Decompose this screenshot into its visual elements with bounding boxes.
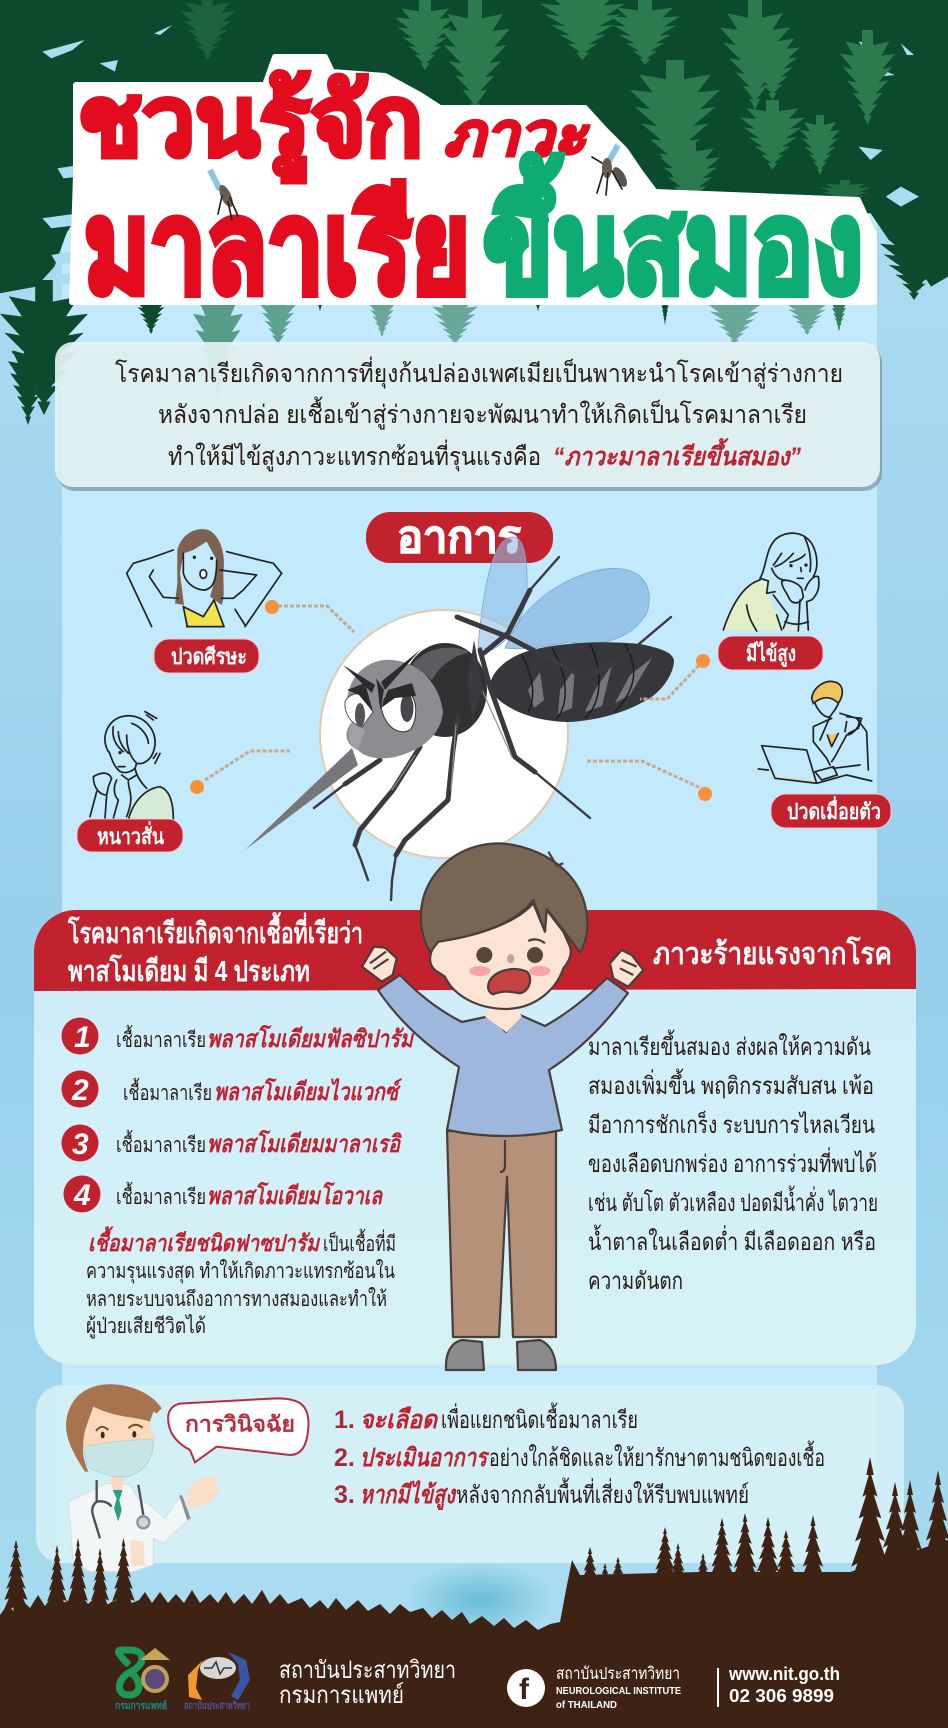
label	[718, 636, 823, 670]
header right: ภาวะร้ายแรงจากโรค	[653, 935, 892, 971]
footer department name: กรมการแพทย์	[279, 1681, 404, 1709]
stethoscope	[92, 1480, 149, 1538]
diagnosis item 3: 3.	[334, 1481, 355, 1509]
severity paragraph: มีอาการชักเกร็ง ระบบการไหลเวียน	[588, 1110, 875, 1139]
intro line 2: หลังจากปล่อ ยเชื้อเข้าสู่ร่างกายจะพัฒนาทำให้เกิดเป็นโรคมาลาเรีย	[158, 396, 807, 430]
neck	[110, 1477, 124, 1490]
mosquito illustration	[245, 537, 674, 900]
panel: diagnosis	[36, 1384, 904, 1572]
head	[362, 843, 643, 1032]
mosquito head	[245, 650, 443, 850]
list item 2: 2	[71, 1074, 89, 1107]
title white backing	[72, 57, 874, 302]
sweater	[378, 975, 628, 1136]
list item 1: พลาสโมเดียมฟัลซิปารัม	[207, 1024, 415, 1053]
connector	[272, 606, 354, 632]
symptom: chills	[77, 712, 290, 852]
facebook page text: of THAILAND	[556, 1699, 617, 1711]
eyes	[476, 947, 492, 963]
falciparum note: เชื้อมาลาเรียชนิดฟาซปารัม	[88, 1226, 321, 1256]
speech bubble	[168, 1398, 308, 1462]
diagnosis item 3: หลังจากกลับพื้นที่เสี่ยงให้รีบพบแพทย์	[456, 1477, 749, 1509]
forest silhouette and ground	[0, 1457, 948, 1728]
intro line 3: ทำให้มีไข้สูงภาวะแทรกซ้อนที่รุนแรงคือ	[168, 439, 541, 472]
list item 3: เชื้อมาลาเรีย	[116, 1130, 206, 1157]
list item 3: 3	[72, 1128, 89, 1161]
symptom: body ache: ปวดเมื่อยตัว	[787, 795, 881, 824]
severity paragraph	[588, 1029, 878, 1295]
symptom: headache	[127, 529, 354, 673]
panel body	[34, 985, 916, 1365]
intro line 1: โรคมาลาเรียเกิดจากการที่ยุงก้นปล่องเพศเมียเป็นพาหะนำโรคเข้าสู่ร่างกาย	[115, 356, 843, 389]
severity paragraph: น้ำตาลในเลือดต่ำ มีเลือดออก หรือ	[588, 1224, 876, 1256]
bubble text: การวินิจฉัย	[185, 1412, 295, 1437]
symptom: chills: หนาวสั่น	[97, 820, 164, 849]
falciparum note	[86, 1226, 396, 1339]
forest canopy	[0, 0, 948, 425]
title word malaria: มาลาเรีย	[84, 177, 470, 320]
footer institute name: สถาบันประสาทวิทยา	[279, 1657, 456, 1684]
list item 3: พลาสโมเดียมมาลาเรอิ	[207, 1129, 402, 1158]
list item 2: พลาสโมเดียมไวแวกซ์	[214, 1077, 403, 1106]
falciparum note: เป็นเชื้อที่มี	[323, 1229, 396, 1256]
mask	[83, 1440, 153, 1477]
symptom: high fever	[640, 533, 823, 699]
pants	[447, 1131, 556, 1337]
list item 2: เชื้อมาลาเรีย	[123, 1078, 212, 1105]
list item 1: เชื้อมาลาเรีย	[116, 1025, 206, 1052]
falciparum note: หลายระบบจนถึงอาการทางสมองและทำให้	[86, 1287, 387, 1311]
icon: worried woman	[723, 533, 819, 631]
icon: small mosquito left	[210, 170, 238, 220]
phone: 02 306 9899	[729, 1686, 834, 1706]
diagnosis item 2: 2.	[334, 1444, 355, 1472]
hands	[185, 1477, 222, 1508]
label	[154, 639, 259, 673]
icon: shivering woman	[90, 712, 173, 820]
header left line 2: พาสโมเดียม มี 4 ประเภท	[68, 953, 310, 988]
panel: plasmodium and severity	[34, 910, 916, 1365]
list item 4: พลาสโมเดียมโอวาเล	[207, 1181, 383, 1210]
connector	[205, 751, 290, 780]
severity paragraph: สมองเพิ่มขึ้น พฤติกรรมสับสน เพ้อ	[588, 1068, 874, 1100]
facebook page text: สถาบันประสาทวิทยา	[556, 1664, 680, 1683]
red header band	[34, 910, 916, 991]
left fist	[362, 947, 397, 982]
hair	[66, 1384, 162, 1472]
footer	[115, 1648, 840, 1712]
mosquito legs	[314, 557, 671, 900]
logo: department 80 years	[115, 1648, 170, 1712]
mosquito abdomen	[490, 642, 674, 722]
cheeks	[469, 966, 491, 976]
list item 1: 1	[74, 1021, 91, 1054]
diagnosis item 3: หากมีไข้สูง	[360, 1480, 456, 1510]
intro highlighted term: “ภาวะมาลาเรียขึ้นสมอง”	[553, 438, 801, 471]
facebook page text: NEUROLOGICAL INSTITUTE	[556, 1685, 681, 1697]
tie	[113, 1490, 123, 1522]
symptom: headache: ปวดศีรษะ	[171, 644, 247, 669]
website: www.nit.go.th	[728, 1664, 840, 1684]
diagnosis item 2: อย่างใกล้ชิดและให้ยารักษาตามชนิดของเชื้อ	[489, 1440, 825, 1472]
face	[83, 1407, 157, 1450]
icon: small mosquito right	[592, 145, 630, 195]
heading: symptoms: อาการ	[397, 513, 521, 562]
mosquito thorax	[403, 643, 487, 737]
list item 4	[64, 1176, 383, 1212]
list item 1	[62, 1018, 415, 1054]
heading: symptoms	[366, 512, 553, 563]
logo: neurological institute: สถาบันประสาทวิทยา	[184, 1700, 250, 1712]
symptom: body ache	[587, 681, 891, 828]
left and right hanging branches	[0, 200, 948, 425]
falciparum note: ความรุนแรงสุด ทำให้เกิดภาวะแทรกซ้อนใน	[86, 1259, 395, 1284]
diagnosis item 3	[334, 1477, 749, 1510]
severity paragraph: มาลาเรียขึ้นสมอง ส่งผลให้ความดัน	[588, 1029, 871, 1061]
mouth	[488, 969, 530, 994]
diagnosis item 1: เพื่อแยกชนิดเชื้อมาลาเรีย	[441, 1402, 638, 1434]
coat	[68, 1483, 190, 1572]
header left line 1: โรคมาลาเรียเกิดจากเชื้อที่เรียว่า	[67, 911, 363, 950]
medium green foliage	[180, 0, 895, 210]
white circle	[320, 610, 568, 858]
neck	[485, 1007, 522, 1032]
character: shouting boy	[362, 843, 643, 1370]
title line one: ชวนรู้จัก	[78, 66, 423, 183]
face	[430, 903, 571, 1009]
diagnosis item 1: 1.	[334, 1406, 355, 1434]
eyes	[101, 1432, 105, 1438]
divider	[717, 1668, 719, 1707]
character: doctor	[66, 1384, 308, 1572]
shoes	[446, 1340, 556, 1370]
title	[72, 57, 874, 320]
logo: neurological institute	[184, 1652, 250, 1712]
symptom: high fever: มีไข้สูง	[746, 640, 796, 668]
diagnosis item 2: ประเมินอาการ	[360, 1444, 490, 1472]
connector	[640, 661, 703, 699]
title word phawa: ภาวะ	[444, 101, 590, 168]
icon: person at laptop	[758, 681, 872, 784]
connector	[587, 761, 705, 790]
title word cerebral: ขึ้นสมอง	[483, 154, 863, 320]
sleeve cuff	[179, 1495, 191, 1520]
icon: woman holding head	[127, 529, 282, 627]
logo: department 80 years: กรมการแพทย์	[115, 1700, 167, 1712]
severity paragraph: ความดันตก	[588, 1268, 683, 1295]
facebook page text	[556, 1664, 681, 1711]
diagnosis item 2	[334, 1440, 825, 1472]
diagnosis item 1: จะเลือด	[360, 1406, 439, 1434]
label	[77, 819, 183, 852]
right fist	[610, 950, 643, 987]
translucent hanging ferns	[193, 285, 847, 400]
list item 4: 4	[73, 1179, 91, 1212]
icon: facebook	[507, 1669, 545, 1707]
list item 2	[62, 1070, 403, 1108]
diagnosis item 1	[334, 1402, 638, 1434]
falciparum note: ผู้ป่วยเสียชีวิตได้	[86, 1314, 206, 1339]
list item 3	[62, 1124, 402, 1162]
icon: facebook: f	[519, 1673, 530, 1706]
mosquito wings	[478, 537, 649, 650]
panel: introduction	[55, 342, 882, 491]
list item 4: เชื้อมาลาเรีย	[116, 1182, 206, 1209]
hair	[421, 843, 587, 952]
label	[771, 794, 891, 828]
